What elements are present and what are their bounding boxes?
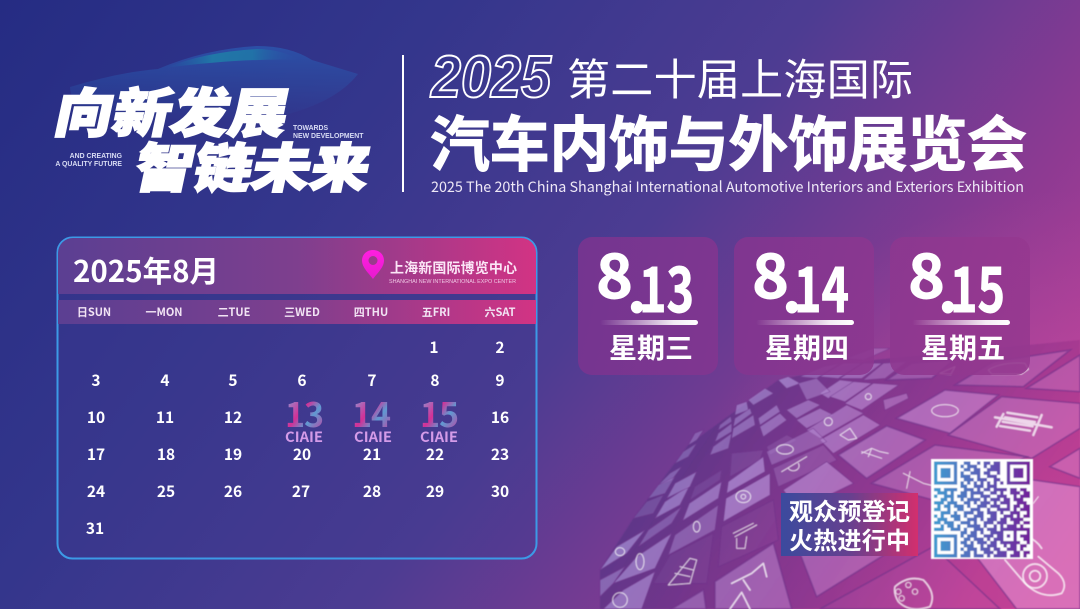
date card 8.14: 星期四 (765, 327, 849, 367)
date card 8.14 (734, 229, 874, 375)
slogan line 1: 向新发展 (49, 71, 297, 147)
calendar dates: 31 (86, 517, 104, 539)
venue: 上海新国际博览中心 (390, 260, 517, 276)
english slogan right (293, 125, 364, 140)
panel: calendar (58, 238, 536, 558)
calendar dates: 2 (495, 336, 505, 358)
calendar dates: 10 (87, 406, 105, 428)
outlined year: 2025 (430, 44, 552, 110)
date card 8.15: 星期五 (921, 327, 1005, 367)
month: 2025年8月 (73, 249, 219, 291)
date card 8.15 (890, 229, 1030, 375)
calendar dates: 20 (293, 443, 311, 465)
english slogan right: NEW DEVELOPMENT (293, 133, 364, 140)
date card 8.15: . (938, 241, 958, 330)
logo: car silhouette and slogan (49, 46, 379, 202)
calendar dates: 25 (157, 480, 175, 502)
date card 8.13: 13 (639, 241, 694, 330)
date card 8.14: 8 (752, 229, 789, 316)
calendar dates: 9 (495, 369, 505, 391)
icons on tiles (613, 363, 1064, 609)
calendar dates: 12 (224, 406, 242, 428)
date card 8.14: 14 (794, 241, 849, 330)
calendar frame (58, 238, 536, 558)
weekday row (58, 300, 536, 324)
venue english: SHANGHAI NEW INTERNATIONAL EXPO CENTER (389, 279, 516, 285)
QR code (931, 459, 1033, 559)
title line 1: 第二十届上海国际 (567, 57, 913, 105)
calendar dates: 24 (87, 480, 105, 502)
english title: 2025 The 20th China Shanghai International Automotive Interiors and Exteriors Exhibition (431, 176, 1024, 197)
calendar dates: 6 (297, 369, 307, 391)
calendar dates: 1 (429, 336, 439, 358)
weekday row: 四THU (354, 304, 388, 320)
calendar dates: 16 (491, 406, 509, 428)
divider (402, 55, 404, 192)
registration callout (781, 493, 918, 556)
highlighted dates: CIAIE (285, 427, 323, 447)
tiled globe with automotive icons (600, 340, 1080, 609)
highlighted dates (285, 388, 458, 447)
english slogan left (55, 153, 122, 168)
date card 8.13: 星期三 (609, 327, 693, 367)
calendar dates: 22 (426, 443, 444, 465)
highlighted dates: 14 (352, 388, 391, 437)
calendar dates: 5 (228, 369, 238, 391)
weekday row: 二TUE (218, 304, 251, 320)
title line 2: 汽车内饰与外饰展览会 (430, 112, 1027, 179)
calendar dates: 17 (87, 443, 105, 465)
weekday row: 一MON (145, 304, 183, 320)
date card 8.15: 8 (908, 229, 945, 316)
weekday row: 三WED (284, 304, 320, 320)
english slogan right: TOWARDS (293, 125, 328, 132)
date card 8.14: . (782, 241, 802, 330)
calendar dates: 30 (491, 480, 509, 502)
calendar dates (86, 336, 509, 539)
date card 8.13: . (627, 241, 647, 330)
title block (430, 44, 1027, 197)
english slogan left: A QUALITY FUTURE (55, 161, 122, 168)
english slogan left: AND CREATING (70, 153, 122, 160)
weekday row: 五FRI (422, 304, 450, 320)
highlighted dates: CIAIE (420, 427, 458, 447)
date card 8.13: 8 (596, 229, 633, 316)
calendar dates: 3 (91, 369, 101, 391)
highlighted dates: CIAIE (354, 427, 392, 447)
calendar dates: 27 (292, 480, 310, 502)
date card 8.13 (578, 229, 718, 375)
car silhouette (70, 46, 358, 122)
calendar dates: 18 (157, 443, 175, 465)
calendar dates: 7 (367, 369, 377, 391)
calendar dates: 19 (224, 443, 242, 465)
registration callout: 火热进行中 (789, 528, 910, 555)
calendar dates: 21 (363, 443, 381, 465)
calendar dates: 11 (156, 406, 174, 428)
calendar dates: 8 (430, 369, 440, 391)
weekday row: 六SAT (485, 304, 516, 320)
calendar dates: 26 (224, 480, 242, 502)
highlighted dates: 15 (420, 388, 458, 437)
date card 8.15: 15 (950, 241, 1005, 330)
calendar dates: 4 (160, 369, 170, 391)
calendar header (58, 238, 536, 294)
registration callout: 观众预登记 (789, 499, 910, 526)
slogan line 2: 智链未来 (129, 126, 379, 202)
highlighted dates: 13 (285, 388, 323, 437)
weekday row: 日SUN (77, 304, 111, 320)
calendar dates: 28 (363, 480, 381, 502)
location pin (362, 250, 384, 279)
calendar dates: 23 (491, 443, 509, 465)
calendar dates: 29 (426, 480, 444, 502)
